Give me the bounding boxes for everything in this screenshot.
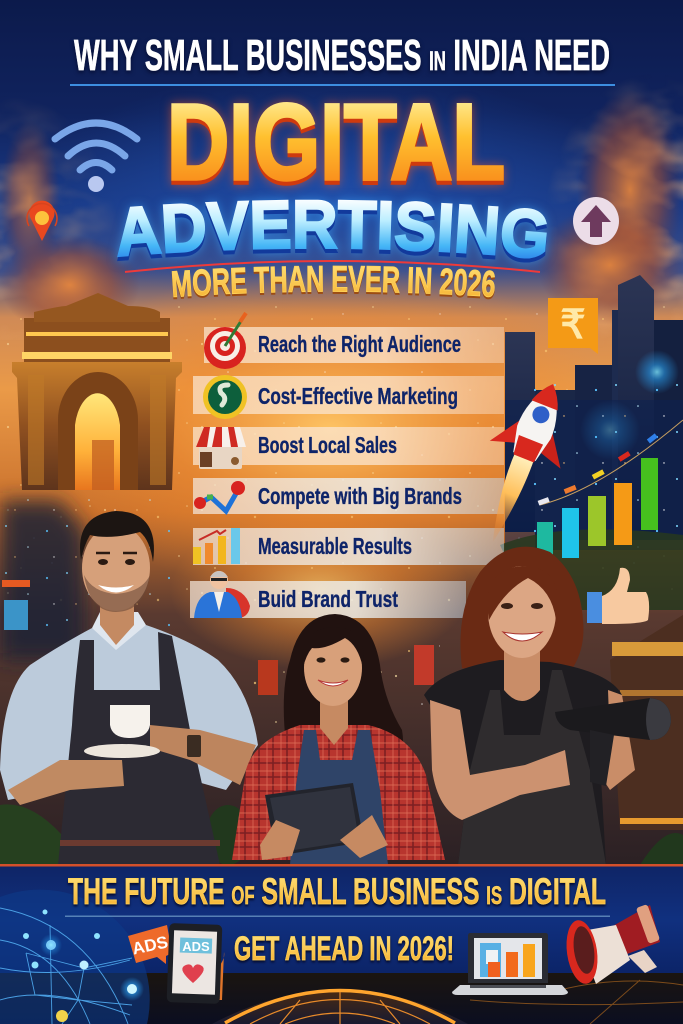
- icon: target with dart: [204, 313, 246, 369]
- icon: rising check chart: [194, 481, 245, 511]
- icon: phone with ad: [167, 923, 224, 1004]
- row: reach the right audience: Reach the Right Audience: [258, 331, 461, 357]
- icon: map pin: [27, 201, 57, 241]
- person: man with coffee: [0, 511, 258, 865]
- icon: phone with ad: ADS: [182, 939, 210, 954]
- icon: ADS speech bubble: ADS: [131, 932, 170, 959]
- headline: DIGITAL: DIGITAL: [167, 81, 505, 202]
- person: woman with tablet: [232, 614, 445, 865]
- bar chart with rising trend line: [537, 420, 683, 558]
- headline: ADVERTISING: ADVERTISING: [112, 195, 552, 268]
- row: build brand trust: Buid Brand Trust: [258, 586, 398, 612]
- icon: ADS speech bubble: [128, 925, 172, 964]
- footer headline: THE FUTURE OF SMALL BUSINESS IS DIGITAL: [68, 871, 606, 912]
- left arm: [430, 700, 570, 820]
- icon: bar chart: [193, 528, 240, 564]
- panel: benefits list: [190, 313, 504, 618]
- apron: [58, 632, 220, 865]
- row: measurable results: Measurable Results: [258, 533, 412, 559]
- row: build brand trust: [190, 581, 466, 618]
- person: woman with hair dryer: [424, 547, 671, 865]
- row: compete with big brands: [193, 478, 504, 514]
- right arm: [590, 690, 635, 790]
- bottom glowing globe: [212, 990, 468, 1024]
- hair back: [284, 614, 403, 785]
- hair dryer: [555, 698, 671, 740]
- icon: businessman: [194, 571, 250, 618]
- neck and face: [100, 595, 134, 645]
- tablet: [265, 783, 364, 856]
- neck and face: [320, 695, 348, 745]
- subheadline with red arc: MORE THAN EVER IN 2026: [172, 266, 495, 300]
- row: boost local sales: Boost Local Sales: [258, 432, 397, 458]
- icon: green coin: [203, 375, 247, 419]
- row: cost-effective marketing: [193, 376, 504, 414]
- rocket with flame trail: [455, 370, 588, 556]
- black top: [424, 660, 622, 865]
- denim apron: [290, 730, 388, 865]
- right forearm and hand: [150, 725, 256, 785]
- row: boost local sales: [193, 427, 504, 465]
- left forearm and hand: [8, 760, 124, 805]
- icon: megaphone: [563, 904, 660, 986]
- hair: [460, 547, 583, 680]
- icon: shop: [196, 427, 246, 469]
- coffee cup and saucer: [110, 705, 150, 738]
- icon: up arrow badge: [573, 197, 619, 245]
- row: reach the right audience: [204, 327, 504, 363]
- subheadline with red arc: [124, 260, 540, 300]
- icon: wifi: [55, 123, 137, 192]
- footer panel: [0, 864, 683, 1024]
- red shirt: [232, 725, 445, 860]
- icon: thumbs up: [587, 568, 649, 624]
- hands: [260, 820, 300, 860]
- left network globe: [0, 890, 150, 1024]
- shirt: [0, 625, 258, 800]
- skyline with digital lights: [500, 275, 683, 610]
- icon: rupee tag: [548, 298, 598, 354]
- neck and face: [504, 645, 540, 701]
- icon: laptop with chart: [452, 933, 568, 995]
- row: measurable results: [193, 528, 504, 565]
- call to action: GET AHEAD IN 2026!: [234, 930, 454, 968]
- row: compete with big brands: Compete with Big Brands: [258, 483, 462, 509]
- India Gate monument: [12, 293, 182, 490]
- bottom-right grid lines: [470, 980, 683, 1024]
- icon: rupee tag: ₹: [560, 303, 586, 347]
- leather apron: [458, 670, 606, 865]
- city lights lower background: [0, 480, 683, 865]
- row: cost-effective marketing: Cost-Effective Marketing: [258, 383, 458, 409]
